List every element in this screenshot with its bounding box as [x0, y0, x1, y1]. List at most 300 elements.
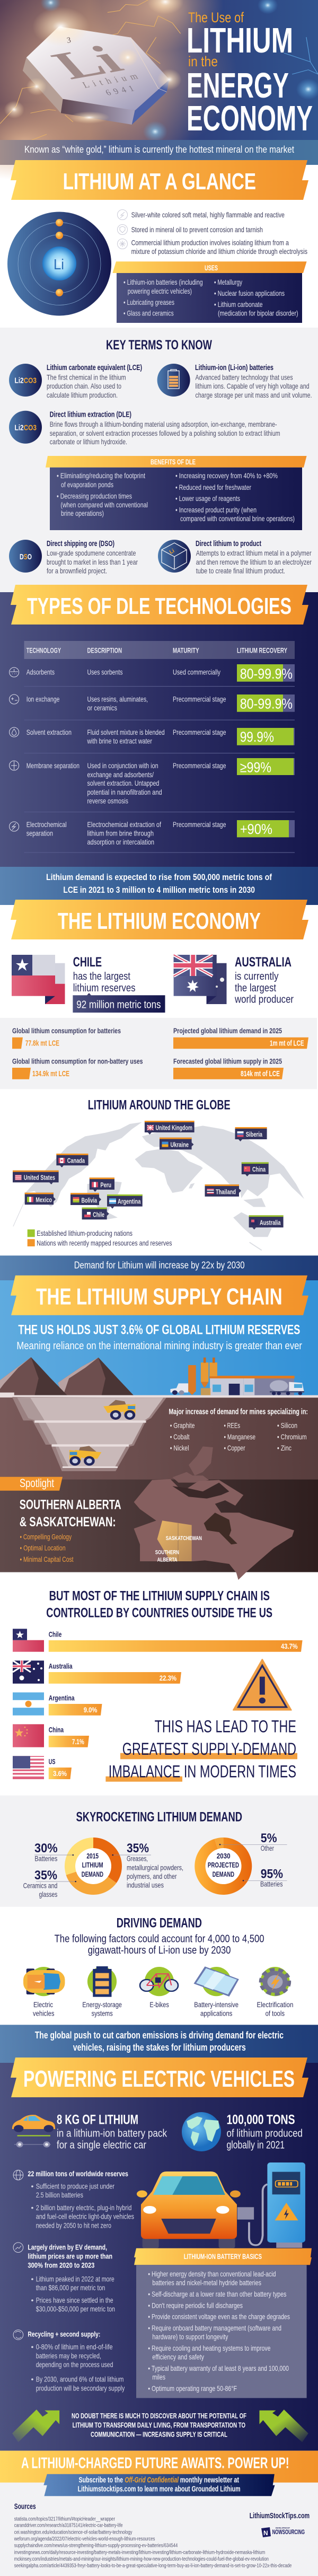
term: lithium carbonate equivalent: Lithium carbonate equivalent (LCE): [47, 364, 142, 372]
term: lithium carbonate equivalent: Li2CO3: [15, 376, 37, 385]
callout band: global push to cut carbon: vehicles, raising the stakes for lithium producers: [73, 2042, 246, 2053]
callout: 30% batteries: Batteries: [34, 1854, 57, 1863]
label: bolivia: Bolivia: [82, 1196, 98, 1204]
table row: solvent extraction: 99.9%: [240, 729, 274, 745]
table row: solvent extraction: [10, 727, 295, 753]
panel: consumption and forecast bars: Forecasted global lithium supply in 2025: [173, 1057, 282, 1066]
panel: benefits of DLE: • Reduced need for freshwater: [175, 483, 251, 491]
banner: the lithium economy: [11, 900, 308, 939]
panel: key terms to know: [0, 328, 318, 592]
chart: world map with country labels: [13, 1121, 304, 1250]
list: recycling: [13, 2330, 125, 2392]
list: 22 million tons: and fuel-cell electric light-duty vehicles: [36, 2212, 134, 2221]
sources: supplychaindive.com/news/us-strengthening-lithium-supply-processing-ev-batteries/634544: [14, 2543, 178, 2549]
panel: footer background: [0, 2483, 318, 2576]
table row: ion exchange: Ion exchange: [26, 694, 60, 703]
logo: nowsourcing: N: [263, 2529, 268, 2537]
list: lithium prices: $30,000-$50,000 per metric ton: [36, 2305, 115, 2313]
labels: demand drivers: Electric: [33, 2000, 53, 2009]
row: us: US: [49, 1757, 55, 1765]
stat: 8 kg of lithium: 8 KG OF LITHIUM: [57, 2113, 138, 2127]
bar: supply 814k: [173, 1068, 284, 1079]
table row: ion exchange: 80-99.9%: [240, 696, 293, 712]
callout: 35% greases: polymers, and other: [127, 1872, 177, 1880]
callout band: demand 22x: [0, 1255, 318, 1280]
heading: DRIVING DEMAND: [117, 1915, 202, 1930]
labels: demand drivers: applications: [200, 2009, 232, 2018]
heading: SKYROCKETING LITHIUM DEMAND: [76, 1809, 242, 1824]
list: 22 million tons: needed by 2050 to hit net zero: [36, 2221, 111, 2229]
stat: australia: world producer: [234, 994, 294, 1006]
table row: membrane separation: Precommercial stage: [173, 761, 226, 770]
table row: electrochemical separation: Electrochemical extraction of: [87, 820, 161, 829]
illustration: dump trucks: [69, 1400, 136, 1466]
chart: 2015 donut: LITHIUM: [82, 1861, 103, 1869]
table row: ion exchange: Uses resins, aluminates,: [87, 694, 148, 703]
text: mine demand list: • Zinc: [277, 1444, 292, 1452]
element symbol on block: 3: [66, 36, 72, 45]
icon: shield: [118, 225, 127, 234]
label: australia: Australia: [260, 1218, 281, 1226]
heading: supply chain controlled outside the us: [46, 1588, 272, 1621]
labels: demand drivers: Battery-intensive: [194, 2000, 238, 2009]
table row: ion exchange: or ceramics: [87, 704, 117, 712]
hero illustration: lithium element block with lightning: [0, 0, 318, 180]
label: argentina: Argentina: [118, 1198, 141, 1206]
label: united states: [13, 1171, 59, 1184]
bar: batteries 77.8k: 77.8k mt LCE: [25, 1039, 59, 1048]
icon: e-bike: [140, 1974, 178, 1991]
chart: 2015 donut: 2015: [86, 1852, 99, 1860]
label: chile: [82, 1208, 109, 1219]
icon: australia flag: [13, 1660, 44, 1684]
title: The Use of: [188, 10, 244, 25]
table row: adsorbents: [10, 664, 295, 687]
table row: solvent extraction: with brine to extract water: [87, 737, 152, 745]
labels: demand drivers: [33, 2000, 293, 2018]
panel: lithium-ion battery basics: • Require cooling and heating systems to improve: [148, 2344, 271, 2352]
list: recycling: •: [31, 2343, 34, 2351]
table header: LITHIUM RECOVERY: [237, 646, 287, 655]
closing statement: [72, 2412, 246, 2438]
callout band: lithium demand rise: [0, 867, 318, 905]
table row: ion exchange: [10, 694, 295, 720]
row: us: 3.6%: [53, 1769, 67, 1778]
panel: lithium-ion battery basics: • Don't require periodic full discharges: [148, 2301, 243, 2309]
list: recycling: By 2030, around 6% of total lithium: [36, 2375, 123, 2384]
label: argentina: [107, 1194, 143, 1209]
label: mexico: [25, 1193, 56, 1205]
panel: benefits of DLE: • Increased product purity (when: [175, 506, 257, 514]
term: direct lithium extraction: [9, 411, 280, 446]
stat: chile: has the largest: [73, 971, 130, 982]
panel: benefits of DLE: (when compared with conventional: [60, 500, 148, 509]
term: lithium-ion batteries: [157, 364, 312, 399]
labels: demand drivers: E-bikes: [149, 2000, 169, 2009]
row: argentina: [13, 1692, 102, 1716]
text: mine demand list: • Cobalt: [170, 1432, 190, 1441]
label: united states: United States: [24, 1173, 55, 1181]
panel: skyrocketing lithium demand: [0, 1796, 318, 1907]
table row: membrane separation: ≥99%: [240, 760, 271, 776]
label: thailand: [205, 1184, 241, 1197]
chart: 2015 donut: DEMAND: [82, 1870, 103, 1878]
icon: globe outline: [13, 2170, 23, 2180]
panel: lithium-ion battery basics: [134, 2248, 312, 2398]
label: peru: Peru: [100, 1181, 111, 1189]
subheading: The following factors could account for 4,000 to 4,500: [55, 1933, 264, 1945]
text: mine demand list: • Nickel: [170, 1444, 189, 1452]
panel: hero header: [0, 0, 318, 180]
element symbol on block: Lithium: [81, 71, 140, 90]
table header: DESCRIPTION: [87, 646, 122, 655]
panel: supply chain mining scene: [0, 1276, 318, 1482]
labels: demand drivers: vehicles: [33, 2009, 54, 2018]
panel: uses: powering electric vehicles): [128, 287, 192, 295]
row: argentina: 9.0%: [84, 1705, 98, 1714]
panel: lithium-ion battery basics: • Optimum operating range 50-86°F: [148, 2384, 237, 2393]
row: argentina: Argentina: [49, 1693, 75, 1702]
band: a lithium-charged future: [0, 2451, 318, 2483]
term: direct lithium to product: Li: [169, 548, 175, 556]
panel: driving demand: [23, 1915, 293, 2018]
text: mine demand list: • Silicon: [277, 1421, 297, 1429]
icon: argentina flag: [13, 1692, 44, 1716]
row: australia: 22.3%: [160, 1674, 176, 1682]
subheading: [55, 1933, 264, 1956]
term: lithium carbonate equivalent: [9, 364, 142, 399]
bar: demand 1m: [173, 1038, 308, 1049]
list: 22 million tons: 22 million tons of worldwide reserves: [28, 2169, 128, 2178]
stat: australia: AUSTRALIA: [235, 955, 292, 970]
banner: the lithium supply chain: [11, 1276, 308, 1315]
table row: solvent extraction: Precommercial stage: [173, 728, 226, 736]
legend: Nations with recently mapped resources and reserves: [37, 1238, 172, 1247]
list: 22 million tons: 2 billion battery electric, plug-in hybrid: [36, 2203, 131, 2212]
list: lithium prices: •: [31, 2296, 34, 2304]
illustration: open pit mine: [0, 1357, 318, 1482]
panel: consumption and forecast bars: Global lithium consumption for batteries: [12, 1026, 121, 1035]
list: spotlight reasons: • Compelling Geology: [20, 1532, 72, 1541]
panel: uses: USES: [205, 263, 218, 272]
title: [187, 10, 313, 138]
illustration: electric car at charger: [137, 2162, 305, 2248]
heading: southern alberta and saskatchewan: [20, 1498, 121, 1529]
list: lithium prices: Largely driven by EV demand,: [28, 2243, 107, 2251]
panel: lithium at a glance: [7, 210, 307, 323]
list: spotlight reasons: • Optimal Location: [20, 1544, 66, 1552]
term: lithium carbonate equivalent: production chain. Also used to: [47, 382, 121, 390]
label: china: [242, 1162, 269, 1176]
icon: charging cable: [237, 2184, 267, 2245]
logo: nowsourcing: DEVELOPED BY: [276, 2526, 290, 2529]
stat: 100,000 tons: of lithium produced: [227, 2128, 303, 2140]
callout: 35% ceramics and glasses: Ceramics and: [23, 1882, 57, 1890]
icon: car with battery pack: [12, 2115, 55, 2148]
row: china: [13, 1724, 89, 1747]
label: thailand: Thailand: [216, 1188, 236, 1195]
title: in the: [188, 54, 218, 69]
heading: KEY TERMS TO KNOW: [106, 338, 212, 353]
panel: benefits of DLE: • Eliminating/reducing the footprint: [57, 471, 145, 480]
sources: statista.com/topics/3217/lithium/#topicHeader__wrapper: [14, 2516, 115, 2522]
banner: types of DLE technologies: [11, 585, 308, 625]
icon: electrolysis: [118, 239, 127, 249]
banner: newsletter subscribe: [43, 2474, 275, 2496]
callout: 35% greases: metallurgical powders,: [127, 1863, 183, 1872]
callout band: lithium demand rise: Lithium demand is expected to rise from 500,000 metric tons of: [46, 872, 272, 882]
label: canada: Canada: [67, 1156, 85, 1164]
stat: chile: CHILE: [73, 955, 102, 970]
row: chile: 43.7%: [281, 1642, 298, 1650]
term: direct lithium to product: tube to create final lithium product.: [196, 567, 285, 575]
callout: 35% greases: 35%: [127, 1841, 149, 1856]
panel: lithium-ion battery basics: batteries and nickel-metal hydride batteries: [152, 2279, 261, 2287]
list: 22 million tons: [13, 2169, 134, 2229]
panel: uses: • Glass and ceramics: [123, 309, 174, 318]
icon: warning triangle: [233, 1659, 292, 1710]
panel: uses: • Metallurgy: [214, 278, 242, 286]
icon: chile flag: [12, 955, 65, 1004]
label: united kingdom: United Kingdom: [156, 1124, 192, 1132]
map: canada: [134, 1446, 294, 1580]
list: 22 million tons: 2.5 billion batteries: [36, 2191, 83, 2199]
table row: electrochemical separation: [10, 820, 295, 853]
table row: membrane separation: [10, 758, 295, 812]
list: lithium prices: Prices have since settled in the: [36, 2296, 113, 2304]
list: 22 million tons: •: [31, 2182, 34, 2190]
icons: demand drivers: [23, 1966, 289, 1997]
label: siberia: [235, 1127, 267, 1141]
panel: benefits of DLE: BENEFITS OF DLE: [151, 458, 196, 466]
bar: batteries 77.8k: [12, 1038, 59, 1049]
callout: 35% greases: Greases,: [127, 1854, 148, 1863]
labels: demand drivers: systems: [92, 2009, 113, 2018]
list: recycling: Recycling + second supply:: [28, 2330, 100, 2338]
callout: 35% greases: [112, 1841, 183, 1889]
callout: 35% ceramics and glasses: glasses: [39, 1890, 57, 1898]
list: recycling: production will be secondary supply: [36, 2384, 125, 2392]
banner: newsletter subscribe: Lithiumstocktips.com to learn more about Grounded Lithium: [78, 2485, 241, 2493]
tag: spotlight: Spotlight: [20, 1476, 54, 1490]
banner: lithium at a glance: [11, 160, 308, 200]
stat: 8 kg of lithium: for a single electric car: [57, 2139, 146, 2151]
icon: charging station: [267, 2162, 305, 2248]
icon: rising chart: [13, 2243, 23, 2253]
legend: Established lithium-producing nations: [37, 1229, 132, 1237]
text: mine demand list: • Graphite: [170, 1421, 195, 1429]
callout: 5% other: 5%: [261, 1831, 277, 1845]
closing statement: LITHIUM TO TRANSFORM DAILY LIVING, FROM TRANSPORTATION TO: [73, 2421, 245, 2429]
bar: supply 814k: 814k mt of LCE: [241, 1069, 280, 1078]
text: mine demand list: • Manganese: [224, 1432, 255, 1441]
stat: chile: lithium reserves: [73, 982, 136, 994]
callout band: demand 22x: Demand for Lithium will increase by 22x by 2030: [74, 1260, 245, 1271]
table row: electrochemical separation: separation: [26, 829, 53, 838]
labels: demand drivers: of tools: [266, 2009, 285, 2018]
label: mexico: Mexico: [36, 1196, 52, 1204]
label: chile: Chile: [93, 1211, 104, 1219]
callout band: lithium demand rise: LCE in 2021 to 3 million to 4 million metric tons in 2030: [63, 885, 255, 895]
table row: adsorbents: Used commercially: [173, 668, 220, 676]
banner: powering electric vehicles: [11, 2058, 308, 2097]
table row: membrane separation: exchange and adsorbents/: [87, 770, 154, 779]
bar: non-battery 134.9k: [12, 1068, 69, 1079]
icon: car front: [137, 2171, 241, 2248]
closing statement: COMMUNICATION — INCREASING SUPPLY IS CRITICAL: [91, 2430, 227, 2438]
stat: 100,000 tons: globally in 2021: [227, 2139, 285, 2151]
list: recycling: •: [31, 2375, 34, 2384]
heading: southern alberta and saskatchewan: & SASKATCHEWAN:: [20, 1515, 116, 1529]
list: lithium prices: than $86,000 per metric ton: [36, 2283, 105, 2292]
table row: membrane separation: solvent extraction. Untapped: [87, 779, 159, 787]
panel: benefits of DLE: [46, 456, 307, 530]
callout: 95% batteries: Batteries: [260, 1880, 283, 1888]
facts list: Stored in mineral oil to prevent corrosion and tarnish: [131, 225, 263, 234]
term: direct shipping ore: brought to market in less than 1 year: [47, 558, 138, 566]
list: lithium prices: lithium prices are up more than: [28, 2252, 112, 2261]
label: siberia: Siberia: [246, 1130, 263, 1138]
tag: spotlight: [0, 1476, 63, 1491]
list: lithium prices: [13, 2243, 115, 2313]
row: chile: Chile: [49, 1630, 61, 1638]
list: lithium prices: Lithium peaked in 2022 at more: [36, 2274, 114, 2283]
element symbol on block: Li: [42, 38, 133, 87]
sources: weforum.org/agenda/2022/07/electric-vehicles-world-enough-lithium-resources: [14, 2536, 155, 2542]
table row: ion exchange: Precommercial stage: [173, 694, 226, 703]
row: chile: [13, 1629, 303, 1652]
list: recycling: 0-80% of lithium in end-of-life: [36, 2343, 113, 2351]
chart: 2030 donut: DEMAND: [213, 1870, 234, 1878]
icon: electrified tool gear: [261, 1970, 289, 1994]
map labels: SOUTHERN: [155, 1550, 179, 1556]
term: direct shipping ore: Low-grade spodumene concentrate: [47, 549, 136, 557]
panel: benefits of DLE: • Lower usage of reagents: [175, 494, 240, 503]
row: australia: [13, 1660, 181, 1684]
term: direct lithium extraction: Li2CO3: [15, 423, 37, 432]
table row: adsorbents: 80-99.9%: [240, 666, 293, 682]
tagline band: [0, 140, 318, 165]
text: mine demand list: • Chromium: [277, 1432, 307, 1441]
panel: uses: • Lithium-ion batteries (including: [123, 278, 203, 286]
callout: 92 million metric tons: 92 million metric tons: [76, 999, 161, 1011]
panel: consumption and forecast bars: [0, 1018, 317, 1089]
icon: chile flag: [13, 1629, 44, 1652]
icon: energy storage battery: [93, 1966, 111, 1997]
table row: electrochemical separation: lithium from brine through: [87, 829, 154, 838]
callout: 30% batteries: 30%: [34, 1841, 58, 1856]
heading: lithium around the globe: LITHIUM AROUND THE GLOBE: [88, 1098, 231, 1113]
panel: uses: • Nuclear fusion applications: [214, 289, 285, 297]
panel: uses: [112, 261, 307, 323]
table row: electrochemical separation: Precommercial stage: [173, 820, 226, 829]
icon: tablet: [193, 1966, 239, 1997]
table row: electrochemical separation: Electrochemical: [26, 820, 67, 829]
labels: demand drivers: Energy-storage: [82, 2000, 122, 2009]
list: 22 million tons: Sufficient to produce just under: [36, 2182, 114, 2190]
term: lithium carbonate equivalent: calculate lithium production.: [47, 391, 118, 399]
term: lithium carbonate equivalent: The first chemical in the lithium: [47, 373, 126, 382]
callout: 5% other: [219, 1831, 287, 1852]
callout: 30% batteries: [34, 1841, 74, 1863]
stat: 8 kg of lithium: in a lithium-ion battery pack: [57, 2128, 167, 2140]
panel: spotlight southern alberta and saskatchewan: [0, 1446, 318, 1580]
chart: 2030 donut: [195, 1831, 287, 1895]
stat: 100,000 tons: [182, 2112, 303, 2151]
icon: us flag: [13, 1756, 44, 1779]
term: lithium-ion batteries: Lithium-ion (Li-ion) batteries: [195, 364, 273, 372]
term: direct lithium to product: Direct lithium to product: [196, 540, 261, 548]
panel: lithium-ion battery basics: hardware) to support longevity: [152, 2333, 228, 2341]
world map: [13, 1122, 304, 1250]
panel: lithium-ion battery basics: miles: [152, 2373, 165, 2381]
banner: newsletter subscribe: Off-Grid Confidential: [125, 2476, 179, 2484]
list: lithium prices: •: [31, 2274, 34, 2283]
label: china: China: [252, 1165, 266, 1173]
banner: newsletter subscribe: monthly newsletter at: [180, 2476, 239, 2484]
stat: 100,000 tons: 100,000 TONS: [227, 2113, 295, 2127]
icon: recycling arrows: [13, 2330, 23, 2340]
sources: caranddriver.com/research/a31875141/electric-car-battery-life: [14, 2522, 123, 2529]
illustration: processing plant: [170, 1358, 304, 1395]
term: direct lithium to product: [158, 540, 312, 575]
table row: solvent extraction: Solvent extraction: [26, 728, 72, 736]
panel: lithium-ion battery basics: LITHIUM-ION BATTERY BASICS: [184, 2252, 262, 2261]
term: direct shipping ore: DSO: [20, 552, 32, 561]
callout band: global push to cut carbon: [0, 2025, 318, 2063]
icon: globe: [182, 2112, 221, 2151]
callout: 95% batteries: [243, 1867, 287, 1888]
list: lithium prices: 300% from 2020 to 2023: [28, 2261, 95, 2269]
element symbol on block: [42, 36, 140, 98]
term: direct shipping ore: Direct shipping ore (DSO): [47, 540, 114, 548]
row: china: China: [49, 1725, 64, 1734]
text: mine demand list: • Copper: [224, 1444, 245, 1452]
stat: australia: [174, 955, 294, 1006]
subheading: gigawatt-hours of Li-ion use by 2030: [88, 1945, 231, 1956]
label: australia: [249, 1215, 284, 1229]
label: peru: [90, 1177, 114, 1192]
term: direct shipping ore: [9, 540, 138, 575]
callout: 95% batteries: 95%: [261, 1867, 283, 1881]
sources: Sources: [14, 2502, 36, 2511]
panel: uses: • Lubricating greases: [123, 298, 174, 306]
table header: TECHNOLOGY: [26, 646, 61, 655]
panel: lithium-ion battery basics: efficiency and safety: [152, 2353, 204, 2361]
icon: lower dump truck: [69, 1446, 101, 1466]
heading: southern alberta and saskatchewan: SOUTHERN ALBERTA: [20, 1498, 121, 1513]
table header: MATURITY: [173, 646, 199, 655]
table row: adsorbents: Uses sorbents: [87, 668, 123, 676]
labels: demand drivers: Electrification: [257, 2000, 293, 2009]
icon: china flag: [13, 1724, 44, 1747]
table row: adsorbents: Adsorbents: [26, 668, 55, 676]
chart: 2015 donut: [23, 1838, 183, 1898]
banner: lithium at a glance: LITHIUM AT A GLANCE: [63, 169, 256, 195]
panel: consumption and forecast bars: Projected global lithium demand in 2025: [173, 1026, 282, 1035]
stat: chile: [12, 955, 165, 1013]
label: bolivia: [70, 1193, 101, 1205]
map labels: SASKATCHEWAN: [166, 1535, 202, 1542]
panel: benefits of DLE: • Decreasing production times: [57, 492, 132, 500]
legend: [28, 1229, 172, 1247]
row: china: 7.1%: [72, 1737, 84, 1746]
label: united kingdom: [145, 1121, 195, 1135]
callout: 5% other: Other: [261, 1844, 274, 1852]
table row: membrane separation: potential in nanofiltration and: [87, 788, 162, 796]
icon: lithium atom: [7, 212, 111, 316]
element symbol on block: 6941: [103, 84, 136, 98]
